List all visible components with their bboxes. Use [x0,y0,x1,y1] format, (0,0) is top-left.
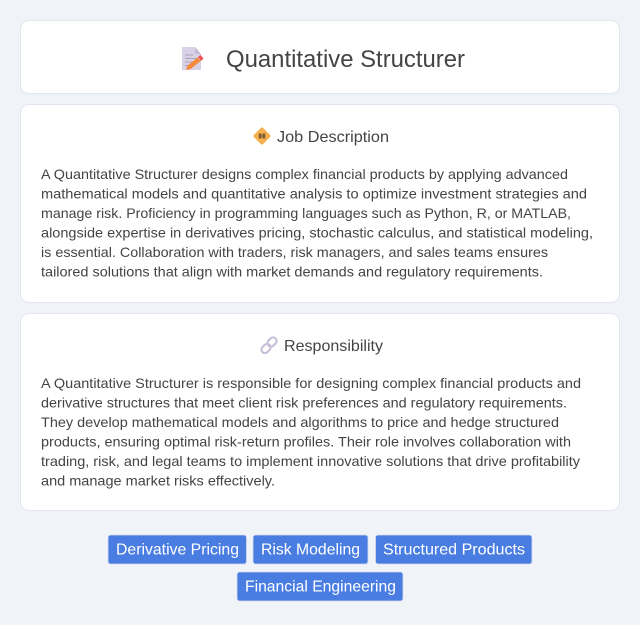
text block: responsibility: products, ensuring optimal risk-return profiles. Their role involves collaboration with [41,434,571,450]
panel: title card [20,20,620,94]
tag: structured products: Structured Products [383,542,525,558]
heading: job description: Job Description [277,129,389,146]
text block: responsibility: trading, risk, and legal teams to implement innovative solutions that drive profitability [41,453,580,469]
text block: responsibility: They develop mathematical models and algorithms to price and hedge structured [41,414,559,430]
tag: structured products [376,535,532,564]
title: Quantitative Structurer [226,46,465,73]
text block: job description [41,166,593,280]
text block: responsibility [41,375,581,488]
text block: job description: mathematical models and quantitative analysis to optimize investment strategies and [41,186,587,202]
text block: responsibility: derivative structures that meet client risk preferences and regulatory requirements. [41,394,567,410]
tag: financial engineering [237,572,403,601]
panel: responsibility [20,314,620,510]
text block: job description: A Quantitative Structurer designs complex financial products by applying advanced [41,166,568,182]
text block: job description: tailored solutions that align with market demands and regulatory requirements. [41,264,543,280]
tag: financial engineering: Financial Engineering [245,578,396,596]
text block: job description: alongside expertise in derivatives pricing, stochastic calculus, and statistical modeling, [41,224,593,240]
tag: derivative pricing [108,535,246,564]
icon: chain link [260,336,278,355]
text block: responsibility: A Quantitative Structurer is responsible for designing complex financial products and [41,375,581,391]
text block: responsibility: and manage market risks effectively. [41,472,275,488]
tag: risk modeling: Risk Modeling [261,542,360,558]
panel: job description [20,104,620,302]
text block: job description: manage risk. Proficiency in programming languages such as Python, R, or MATLAB, [41,205,571,221]
tag: derivative pricing: Derivative Pricing [116,542,239,558]
icon: document with pencil [182,47,204,70]
text block: job description: is essential. Collaboration with traders, risk managers, and sales teams ensures [41,244,548,260]
heading: responsibility: Responsibility [284,338,383,355]
icon: diamond sign [253,127,271,145]
tag: risk modeling [253,535,368,564]
